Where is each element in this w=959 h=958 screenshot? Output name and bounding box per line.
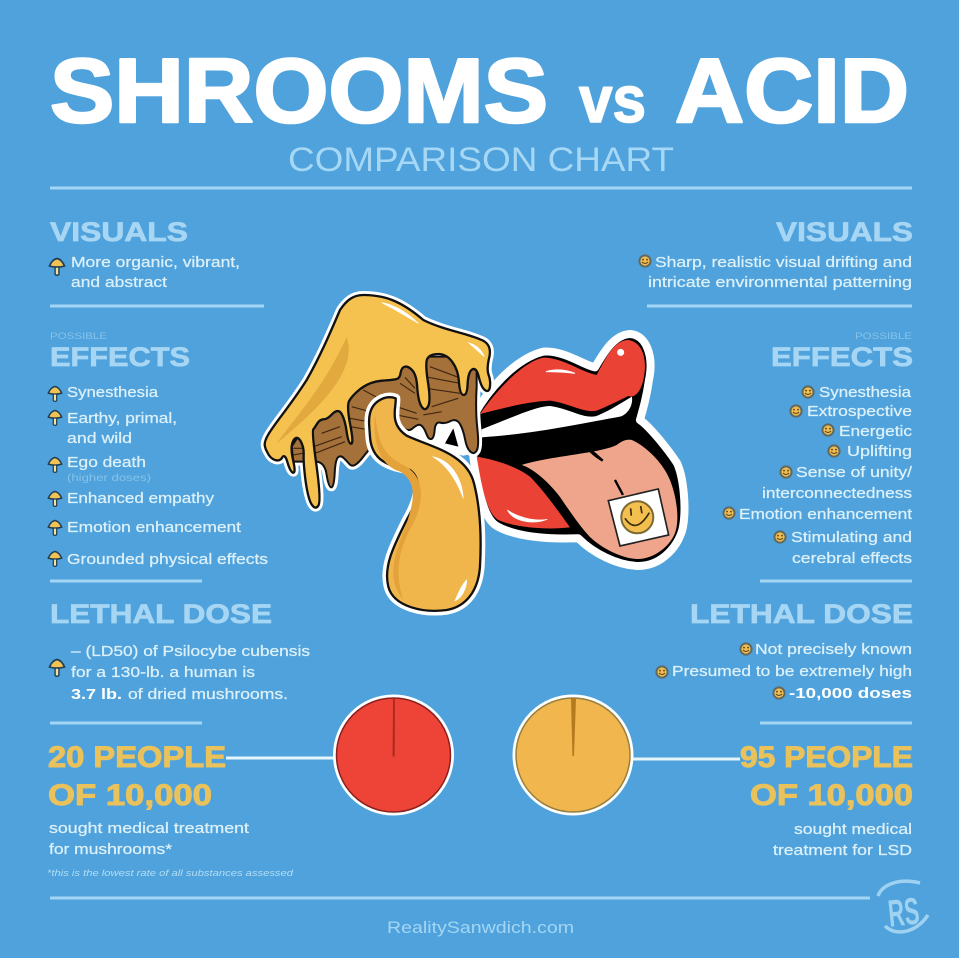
- panel: acid visuals: Sharp, realistic visual drifting and: [655, 255, 912, 271]
- connector line: shrooms statistic to pie: [226, 756, 335, 760]
- tongue: [522, 440, 677, 559]
- statistic: shrooms: OF 10,000: [48, 779, 212, 812]
- panel: acid effects: POSSIBLE: [855, 331, 912, 342]
- panel: acid effects: Sense of unity/: [796, 465, 913, 481]
- mushroom cap with drips: [265, 295, 490, 508]
- panel: shrooms effects: Ego death: [67, 455, 146, 471]
- panel: acid effects: interconnectedness: [762, 486, 912, 502]
- LSD tab with smiley: [608, 489, 669, 546]
- tongue grooves: [587, 447, 623, 495]
- stem highlights: [433, 457, 467, 601]
- lower lip: [477, 457, 570, 528]
- website footer: RealitySanwdich.com: [387, 918, 574, 937]
- stem shading: [374, 415, 421, 600]
- title: SHROOMS: [50, 41, 548, 142]
- panel: shrooms effects: Emotion enhancement: [67, 520, 241, 536]
- panel: shrooms effects: Grounded physical effects: [67, 552, 268, 568]
- lip highlights: [546, 349, 624, 373]
- panel: shrooms visuals: VISUALS: [50, 217, 188, 247]
- panel: shrooms lethal dose: for a 130-lb. a human is: [71, 665, 255, 681]
- panel: acid effects: Emotion enhancement: [739, 507, 912, 523]
- title: vs: [579, 62, 646, 136]
- panel: shrooms visuals: More organic, vibrant,: [71, 255, 240, 271]
- mouth and tongue: [473, 334, 684, 566]
- panel: acid effects: [723, 331, 913, 567]
- panel: acid lethal dose: Presumed to be extremely high: [672, 664, 912, 680]
- title: [50, 41, 909, 142]
- mushroom stem: [369, 397, 481, 611]
- lower lip highlight: [507, 510, 547, 522]
- panel: acid lethal dose: Not precisely known: [755, 642, 912, 658]
- panel: acid lethal dose: LETHAL DOSE: [690, 599, 913, 629]
- panel: shrooms visuals: and abstract: [71, 275, 167, 291]
- panel: shrooms effects: [48, 331, 268, 568]
- panel: acid effects: Uplifting: [847, 444, 912, 460]
- panel: shrooms lethal dose: – (LD50) of Psilocybe cubensis: [71, 644, 310, 660]
- panel: shrooms effects: POSSIBLE: [50, 331, 107, 342]
- panel: shrooms effects: Enhanced empathy: [67, 491, 215, 507]
- statistic: acid: [740, 741, 913, 859]
- panel: shrooms effects: Synesthesia: [67, 385, 159, 401]
- panel: shrooms visuals: [50, 217, 240, 291]
- panel: shrooms lethal dose: [50, 599, 310, 703]
- panel: shrooms effects: and wild: [67, 431, 132, 447]
- statistic: shrooms: [47, 741, 294, 878]
- statistic: acid: OF 10,000: [750, 779, 913, 812]
- panel: acid visuals: [639, 217, 913, 291]
- logo: RS: [878, 881, 928, 936]
- panel: acid effects: Stimulating and: [791, 530, 912, 546]
- white silhouette behind mushroom: [265, 295, 490, 508]
- statistic: shrooms: 20 PEOPLE: [48, 741, 226, 774]
- statistic: shrooms: *this is the lowest rate of all substances assessed: [47, 868, 294, 878]
- cap highlights: [382, 303, 484, 357]
- panel: acid effects: Extrospective: [807, 404, 912, 420]
- statistic: shrooms: sought medical treatment: [49, 821, 249, 837]
- statistic: acid: 95 PEOPLE: [740, 741, 913, 774]
- statistic: shrooms: for mushrooms*: [49, 842, 172, 858]
- logo: RS: RS: [886, 891, 921, 936]
- panel: acid lethal dose: -10,000 doses: [789, 686, 912, 702]
- panel: shrooms lethal dose: of dried mushrooms.: [128, 687, 288, 703]
- panel: acid visuals: intricate environmental patterning: [648, 275, 912, 291]
- connector line: acid statistic to pie: [632, 758, 740, 760]
- panel: shrooms effects: (higher doses): [67, 473, 151, 484]
- panel: acid effects: EFFECTS: [771, 342, 913, 372]
- panel: acid lethal dose: [656, 599, 913, 702]
- panel: acid effects: Synesthesia: [819, 385, 912, 401]
- panel: acid effects: cerebral effects: [792, 551, 912, 567]
- mushroom gills: [292, 357, 478, 487]
- statistic: acid: sought medical: [794, 822, 912, 838]
- panel: acid effects: Energetic: [839, 424, 912, 440]
- pie chart: shrooms 20 of 10,000: [334, 696, 452, 814]
- statistic: acid: treatment for LSD: [773, 843, 912, 859]
- illustration: mushroom and tongue: [265, 295, 684, 611]
- panel: shrooms lethal dose: 3.7 lb.: [71, 687, 122, 703]
- cap shading: [277, 337, 349, 443]
- subtitle: COMPARISON CHART: [288, 141, 674, 179]
- pie chart: acid 95 of 10,000: [514, 696, 632, 814]
- teeth: [482, 397, 632, 437]
- panel: shrooms lethal dose: LETHAL DOSE: [50, 599, 272, 629]
- title: ACID: [675, 41, 909, 142]
- panel: acid visuals: VISUALS: [776, 217, 913, 247]
- panel: shrooms effects: EFFECTS: [50, 342, 190, 372]
- panel: shrooms effects: Earthy, primal,: [67, 411, 177, 427]
- upper lip: [480, 340, 645, 414]
- small mouth gap between gill drips: [445, 428, 458, 447]
